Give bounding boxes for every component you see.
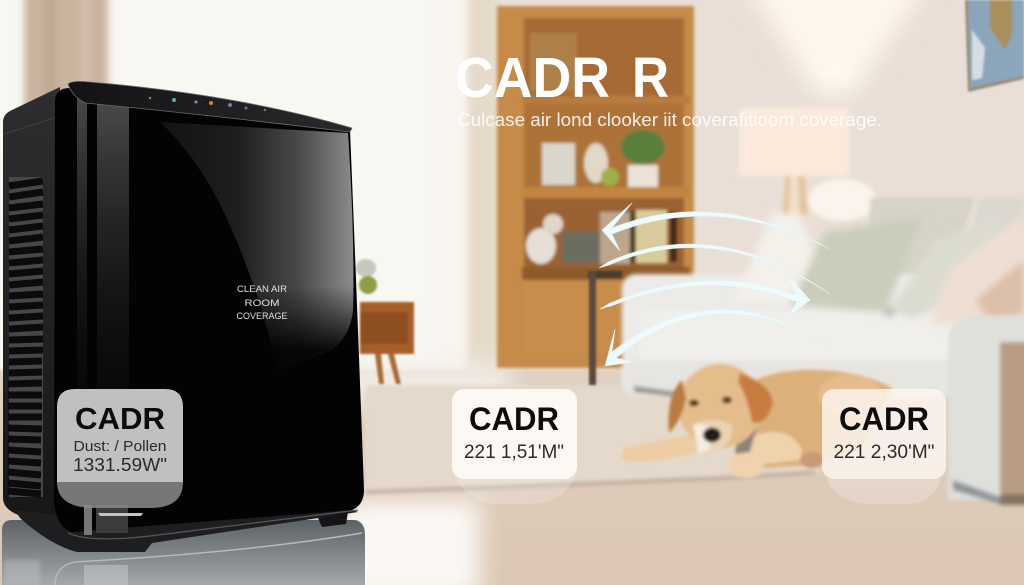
top control panel: [68, 81, 352, 132]
body label: clean air room coverage: CLEAN AIR: [237, 284, 287, 295]
muzzle blaze: [694, 424, 710, 453]
sofa: [622, 198, 1024, 505]
CADR badge: right: CADR: [839, 401, 929, 437]
body label: clean air room coverage: [236, 284, 288, 322]
side panel: [3, 87, 60, 532]
CADR badge: dust and pollen: Dust: / Pollen: [74, 438, 166, 455]
CADR badge: dust and pollen: [57, 389, 183, 508]
CADR badge: right: 221 2,30'M": [834, 442, 934, 463]
neck: [735, 425, 757, 454]
sofa back: [622, 198, 1024, 398]
left ear: [669, 380, 686, 433]
body: [740, 370, 892, 468]
arrow 3: [600, 274, 810, 318]
eyes: [689, 400, 699, 406]
armchair: [948, 316, 1024, 505]
CADR badge: dust and pollen: CADR: [75, 401, 165, 436]
subtitle: Culcase air lond clooker iit coverafitioom coverage.: [457, 110, 882, 130]
arrow 4: [605, 309, 828, 366]
side panel seam: [4, 118, 54, 134]
floor: [0, 370, 1024, 585]
left foreleg: [621, 433, 708, 462]
cushions: [735, 212, 1024, 325]
muzzle: [692, 420, 732, 453]
arrow 1: [602, 203, 830, 251]
arrow 2: [599, 244, 830, 294]
title: R: [632, 46, 669, 110]
right ear: [738, 373, 773, 423]
window and sheer curtains: [0, 0, 497, 390]
glossy reflection: [160, 122, 353, 370]
control lights: [149, 97, 266, 111]
front body: [54, 88, 364, 532]
base highlight line: [68, 510, 358, 539]
air purifier: [3, 81, 364, 552]
side vent grille: [8, 177, 43, 497]
left drape: [24, 0, 108, 110]
table lamp: [739, 108, 876, 221]
coffee table leg: [588, 271, 622, 385]
title: CADR: [455, 46, 610, 110]
window light on floor: [340, 365, 510, 585]
body label: clean air room coverage: COVERAGE: [236, 311, 288, 322]
rear foot: [318, 512, 348, 527]
framed picture: [965, 0, 1024, 92]
purifier reflection on table: [2, 520, 365, 585]
nose: [703, 428, 721, 442]
body label: clean air room coverage: ROOM: [244, 298, 280, 309]
airflow arrows: [599, 203, 830, 366]
CADR badge: middle: 221 1,51'M": [464, 442, 564, 463]
side table with plant: [356, 259, 414, 384]
CADR badge: right: [822, 389, 946, 504]
chest and right foreleg: [729, 432, 802, 478]
wall glow: [745, 0, 930, 94]
CADR badge: dust and pollen: 1331.59W": [73, 454, 167, 475]
head: [678, 364, 762, 448]
hind leg highlight: [818, 375, 882, 415]
rear paw: [800, 452, 824, 468]
dog: [621, 364, 892, 478]
vertical highlights: [77, 96, 129, 535]
rug: [365, 385, 820, 492]
CADR badge: middle: [452, 389, 577, 504]
base: [15, 505, 358, 552]
bottom indicator line: [98, 513, 143, 516]
bookcase: [497, 6, 694, 368]
CADR badge: middle: CADR: [469, 401, 559, 437]
